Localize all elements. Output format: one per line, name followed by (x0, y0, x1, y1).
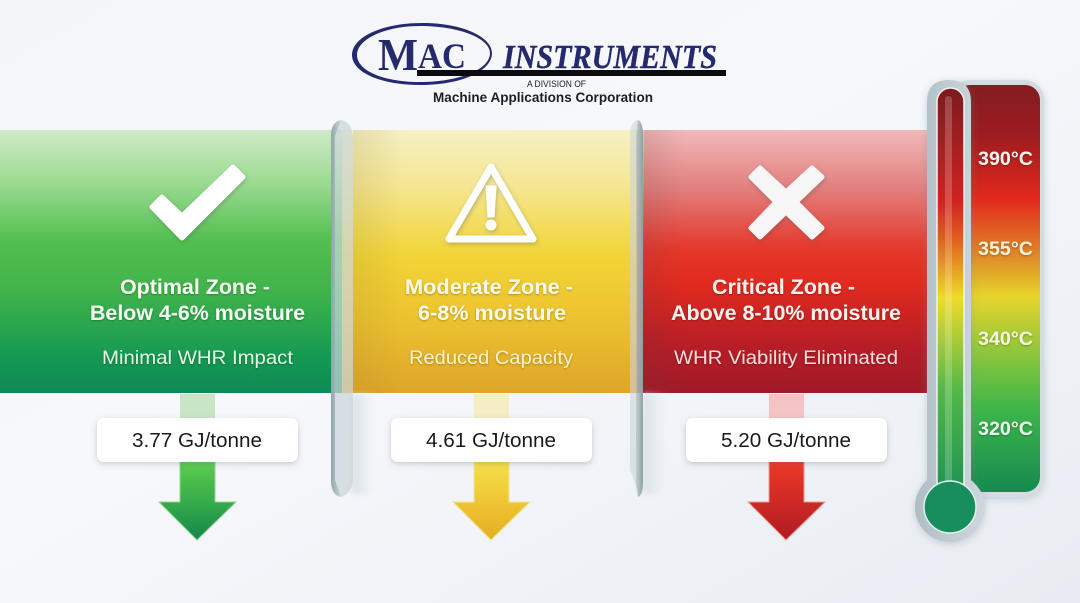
logo oval (352, 23, 492, 85)
value card: moderate: 4.61 GJ/tonne (426, 430, 556, 452)
arrow: moderate (453, 394, 530, 540)
icon: cross (751, 168, 822, 237)
thermometer glass casing (915, 80, 985, 542)
heading: moderate zone: Moderate Zone - (405, 276, 573, 299)
subheading: moderate moisture: 6-8% moisture (418, 302, 566, 325)
panel: optimal zone (0, 130, 342, 393)
thermometer (915, 80, 1044, 542)
logo: MAC Instruments (352, 23, 726, 105)
value card: moderate (391, 418, 592, 462)
panel: critical zone (637, 130, 932, 393)
label 320: 320°C (978, 419, 1033, 440)
arrow: optimal (159, 394, 236, 540)
thermometer bulb (924, 481, 976, 533)
subheading: critical moisture: Above 8-10% moisture (671, 302, 901, 325)
label 340: 340°C (978, 329, 1033, 350)
thermometer tube (937, 88, 964, 508)
value card: optimal (97, 418, 298, 462)
logo wordmark INSTRUMENTS: INSTRUMENTS (502, 39, 717, 76)
label 390: 390°C (978, 149, 1033, 170)
text: critical impact: WHR Viability Eliminated (674, 347, 898, 369)
value card: critical: 5.20 GJ/tonne (721, 430, 851, 452)
value card: critical (686, 418, 887, 462)
value card: optimal: 3.77 GJ/tonne (132, 430, 262, 452)
logo company name: Machine Applications Corporation (433, 89, 653, 105)
logo wordmark MAC: AC (418, 36, 466, 76)
text: moderate impact: Reduced Capacity (409, 347, 573, 369)
glass divider right (630, 120, 643, 497)
logo rule (417, 70, 726, 76)
logo division line: A DIVISION OF (527, 79, 586, 90)
arrow: critical (748, 394, 825, 540)
heading: optimal zone: Optimal Zone - (120, 276, 270, 299)
icon: check mark (152, 167, 243, 238)
heading: critical zone: Critical Zone - (712, 276, 855, 299)
panel: moderate zone (342, 130, 637, 393)
subheading: optimal moisture: Below 4-6% moisture (90, 302, 305, 325)
logo wordmark MAC: M (378, 29, 418, 80)
thermometer scale panel (950, 80, 1044, 497)
text: optimal impact: Minimal WHR Impact (102, 347, 294, 369)
icon: warning triangle (449, 167, 533, 239)
label 355: 355°C (978, 239, 1033, 260)
glass divider left (331, 120, 353, 497)
